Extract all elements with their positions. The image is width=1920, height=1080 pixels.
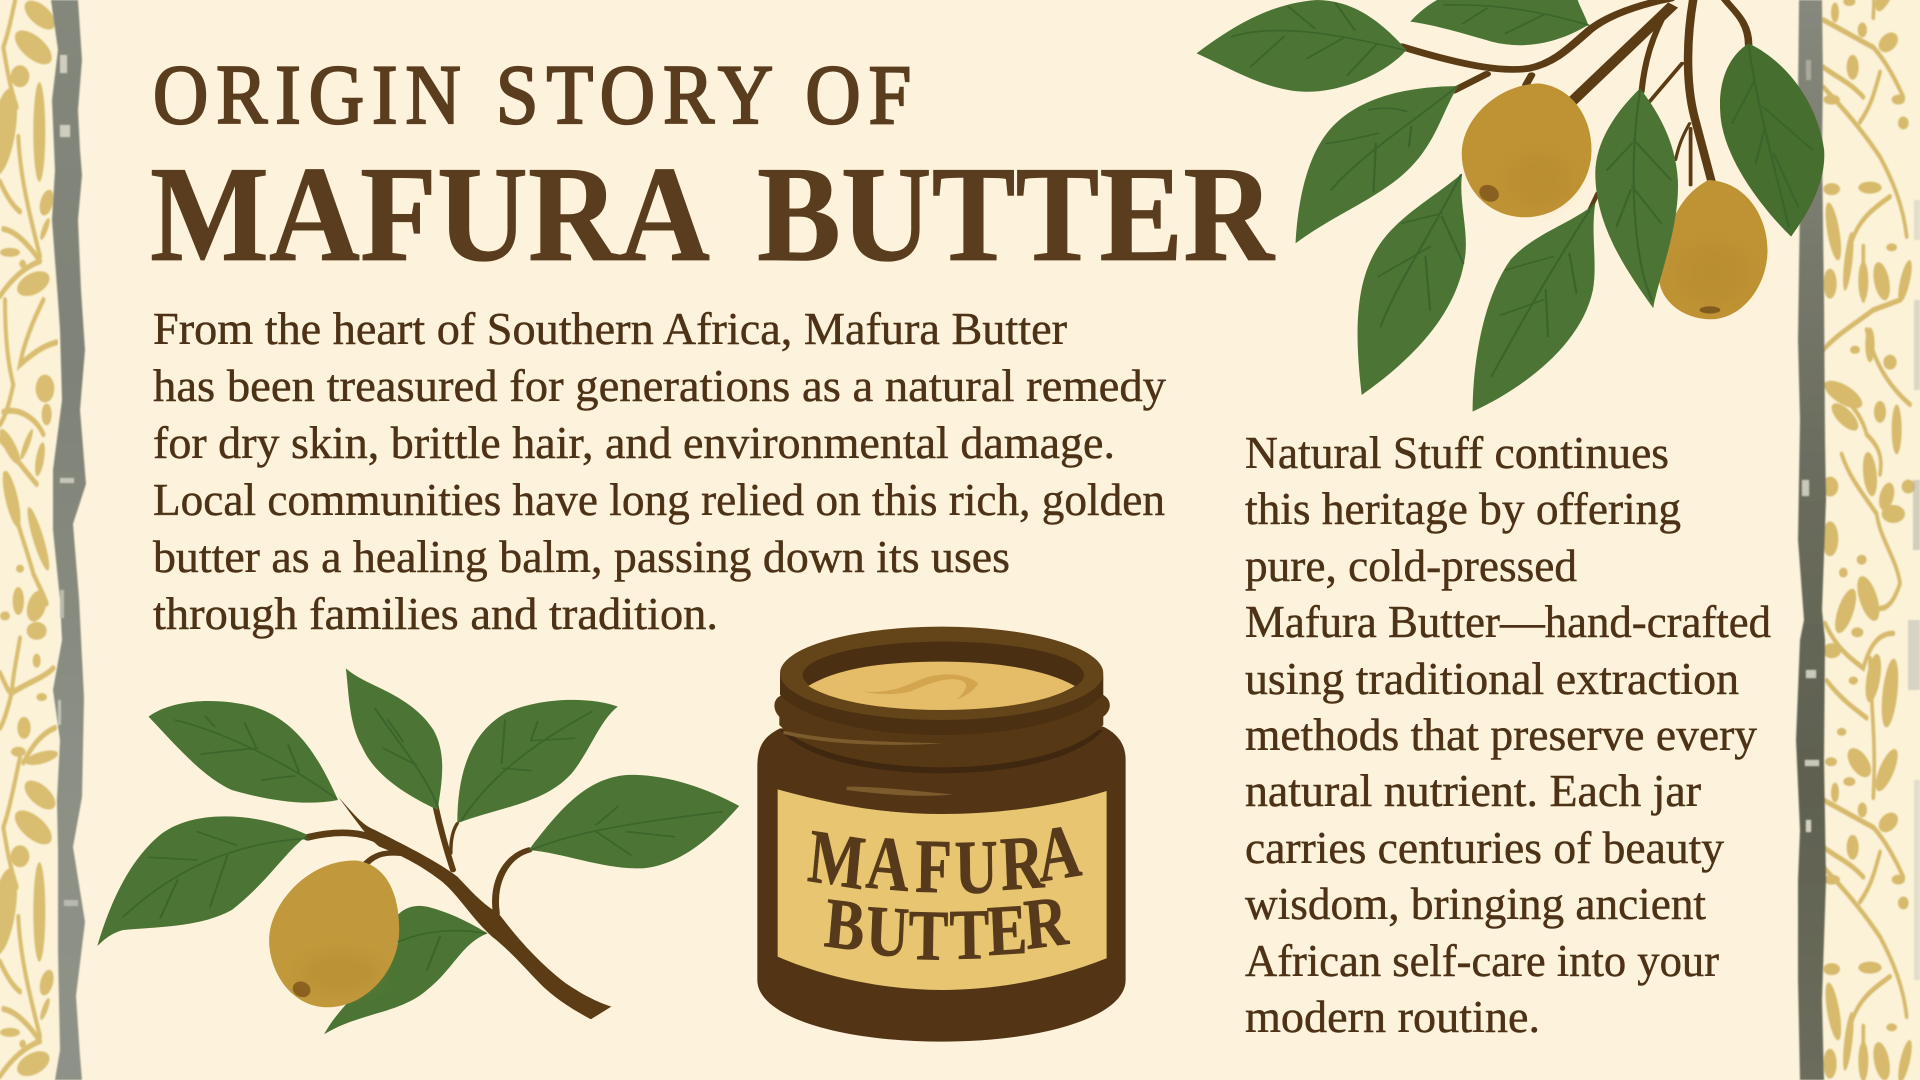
illustration: mafura branch with fruit bottom left [97,668,739,1034]
back leaf [324,906,488,1034]
branch [308,797,611,1019]
butter swirl [863,674,978,700]
text block: Natural Stuff paragraph: wisdom, bringing ancient [1245,879,1706,929]
title line: Mafura Butter: BUTTER [757,138,1276,290]
branch stems [1402,0,1749,210]
text block: origin paragraph: through families and tradition. [153,588,718,639]
left weathered grey edge [51,0,86,1080]
text block: Natural Stuff paragraph [1245,428,1771,1042]
leaf veins [1232,3,1812,377]
title line: Mafura Butter [150,138,1276,290]
text block: Natural Stuff paragraph: natural nutrient. Each jar [1245,766,1701,816]
label text: MAFURA [805,807,1085,910]
leaves [97,668,739,946]
leaves [1197,0,1824,412]
text block: Natural Stuff paragraph: this heritage by offering [1245,484,1681,534]
label text [805,807,1085,976]
text block: origin paragraph: for dry skin, brittle hair, and environmental damage. [153,417,1115,468]
text block: Natural Stuff paragraph: African self-care into your [1245,936,1719,986]
title line: Mafura Butter: MAFURA [150,138,710,290]
text block: Natural Stuff paragraph: pure, cold-pressed [1245,541,1577,591]
jar body [757,727,1126,1042]
fruit left [1462,83,1591,217]
illustration: hanging mafura branch top right [1197,0,1824,412]
text block: origin paragraph: butter as a healing balm, passing down its uses [153,531,1010,582]
text block: Natural Stuff paragraph: Natural Stuff continues [1245,428,1669,478]
fruit [269,861,399,1007]
label text: BUTTER [822,881,1072,976]
illustration: jar of Mafura Butter [757,627,1126,1042]
upper rim [780,675,1103,735]
text block: origin paragraph: From the heart of Southern Africa, Mafura Butter [153,303,1067,354]
lower thread ring [774,695,1110,767]
text block: Natural Stuff paragraph: using traditional extraction [1245,654,1739,704]
text block: origin paragraph [153,303,1166,639]
jar opening [803,642,1084,708]
leaf veins [123,708,722,970]
text block: Natural Stuff paragraph: Mafura Butter—hand-crafted [1245,597,1771,647]
neck shadow [780,730,1103,773]
left botanical border [0,0,59,1080]
text block: origin paragraph: Local communities have long relied on this rich, golden [153,474,1165,525]
label [778,789,1107,990]
text block: Natural Stuff paragraph: modern routine. [1245,992,1540,1042]
right botanical border [1822,0,1920,1080]
butter surface [808,662,1075,710]
text block: Natural Stuff paragraph: methods that preserve every [1245,710,1757,760]
text block: Natural Stuff paragraph: carries centuries of beauty [1245,823,1725,873]
glass highlights [783,731,953,796]
title line: Origin Story Of: ORIGIN STORY OF [153,48,919,142]
text block: origin paragraph: has been treasured for generations as a natural remedy [153,360,1166,411]
fruit right [1659,180,1768,319]
right weathered grey edge [1796,0,1826,1080]
